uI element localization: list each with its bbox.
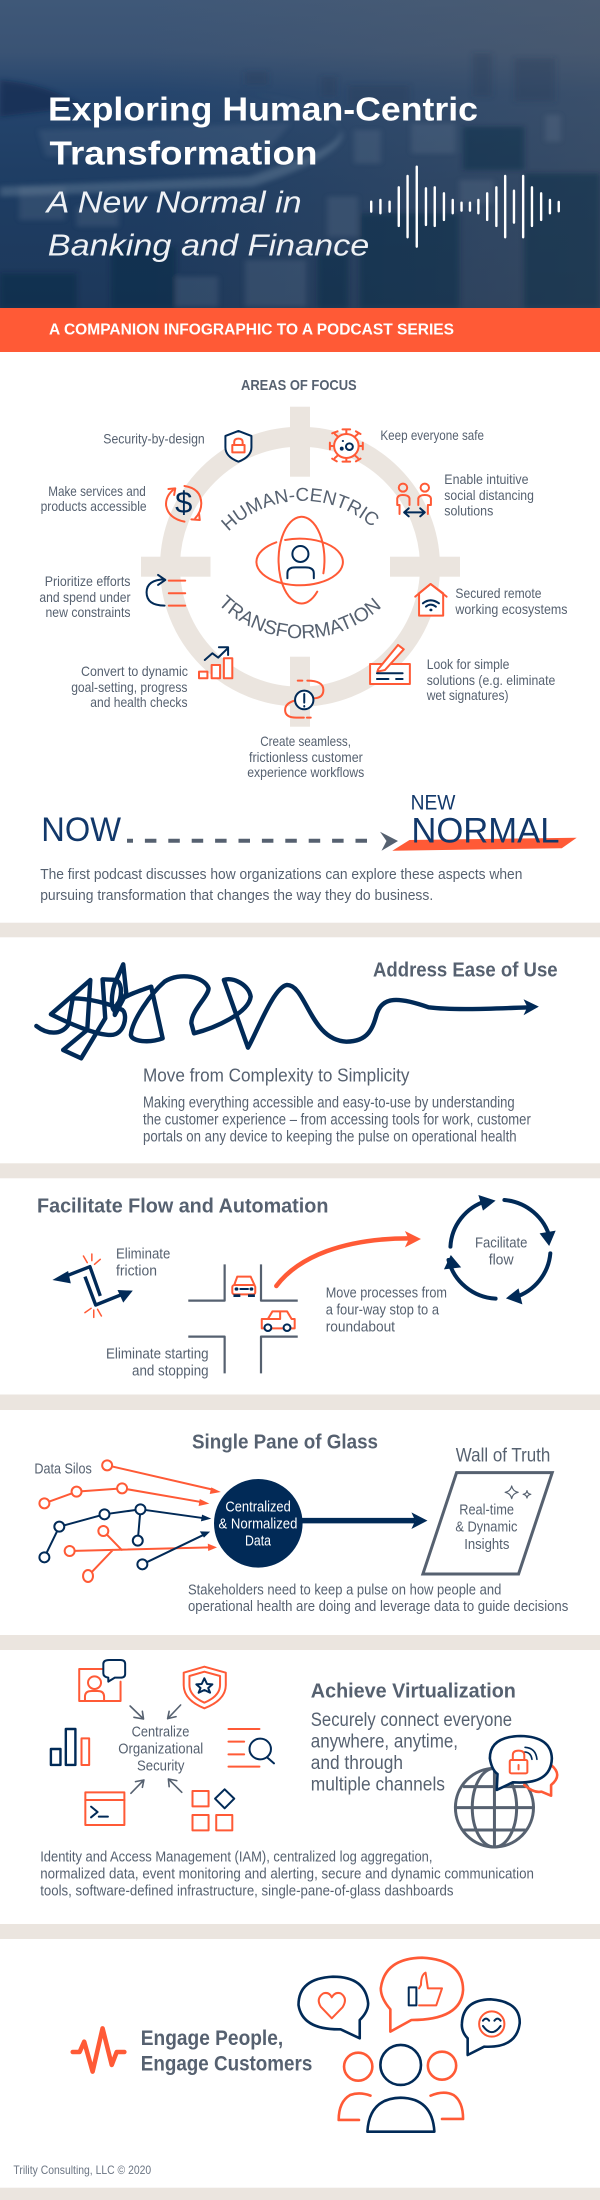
heading	[141, 2026, 312, 2076]
heading: address ease of use: Address Ease of Use	[373, 959, 558, 982]
label: new normal: NORMAL	[411, 812, 560, 851]
label: eliminate friction: friction	[116, 1262, 157, 1279]
panel: facilitate flow and automation	[37, 1195, 556, 1380]
label: move processes: roundabout	[326, 1318, 396, 1335]
label: new normal: NEW	[411, 791, 456, 814]
pane: real-time insights: Insights	[464, 1536, 509, 1553]
pane: real-time insights: & Dynamic	[455, 1519, 518, 1536]
icon: people group	[339, 2045, 463, 2132]
heading: Achieve Virtualization	[311, 1680, 516, 1703]
banner: companion infographic: A COMPANION INFOGRAPHIC TO A PODCAST SERIES	[49, 322, 454, 339]
node: centralized data: Centralized	[225, 1499, 291, 1516]
intro text	[40, 867, 522, 904]
label: make services accessible: products accessible	[41, 498, 147, 514]
label: simple solutions: wet signatures)	[426, 687, 509, 703]
label: frictionless workflows: Create seamless,	[260, 733, 351, 749]
heading: Single Pane of Glass	[192, 1430, 378, 1453]
label: facilitate flow: flow	[489, 1251, 514, 1268]
icon: virus	[330, 429, 363, 462]
label: goal-setting: and health checks	[90, 694, 188, 710]
icon: loop and list	[147, 575, 185, 606]
icon: security shield	[184, 1667, 226, 1708]
label: prioritize efforts: and spend under	[39, 589, 131, 605]
curved label: human-centric: HUMAN-CENTRIC	[220, 488, 378, 531]
tagline	[311, 1710, 512, 1796]
label: make services accessible: Make services and	[48, 483, 146, 499]
panel: address ease of use	[36, 959, 558, 1145]
label: move processes: a four-way stop to a	[326, 1301, 440, 1318]
label: move processes	[326, 1284, 447, 1335]
label: new normal	[411, 791, 560, 851]
icon: globe with chat	[455, 1736, 557, 1847]
body text: Identity and Access Management (IAM), centralized log aggregation,	[40, 1849, 432, 1866]
intersection	[188, 1264, 298, 1373]
label: goal-setting: goal-setting, progress	[71, 679, 188, 695]
subtitle: Banking and Finance	[48, 228, 369, 263]
subtitle: A New Normal in	[44, 185, 302, 220]
label: data silos: Data Silos	[34, 1461, 92, 1477]
intro text: pursuing transformation that changes the way they do business.	[40, 888, 433, 904]
label: make services accessible	[41, 483, 147, 514]
label: simple solutions: Look for simple	[427, 656, 510, 672]
label: secured remote	[455, 585, 568, 617]
icon: flow cycle	[444, 1195, 556, 1304]
icon: house wifi	[415, 584, 447, 616]
label: social distancing: solutions	[444, 502, 493, 518]
heading: Engage Customers	[141, 2052, 312, 2076]
curved label: transformation: TRANSFORMATION	[222, 594, 381, 638]
label: eliminate starting and stopping	[106, 1345, 209, 1380]
body text: the customer experience – from accessing tools for work, customer	[143, 1111, 531, 1128]
banner: companion infographic	[0, 308, 600, 352]
label: simple solutions: solutions (e.g. eliminate	[427, 672, 555, 688]
icon: thumbs-up bubble	[381, 1958, 463, 2032]
icon: signature check	[370, 645, 410, 684]
tagline: Securely connect everyone	[311, 1710, 512, 1731]
icon: dollar cycle: $	[175, 485, 192, 520]
label: social distancing	[444, 471, 534, 518]
panel: single pane of glass	[34, 1430, 568, 1615]
icon: people apart	[397, 484, 431, 516]
body text: tools, software-defined infrastructure, single-pane-of-glass dashboards	[40, 1883, 453, 1900]
label: facilitate flow	[475, 1234, 527, 1268]
icon: video user chat	[79, 1660, 125, 1701]
panel: achieve virtualization	[40, 1660, 557, 1900]
icon: app grid	[192, 1789, 234, 1830]
subheading: Move from Complexity to Simplicity	[143, 1065, 410, 1086]
intro text: The first podcast discusses how organizations can explore these aspects when	[40, 867, 522, 883]
body text: Stakeholders need to keep a pulse on how people and	[188, 1582, 501, 1599]
label: frictionless workflows: experience workflows	[247, 764, 364, 780]
footer credit: Trility Consulting, LLC © 2020	[13, 2163, 151, 2177]
subtitle	[44, 185, 369, 263]
label: now: NOW	[41, 811, 121, 849]
tagline: multiple channels	[311, 1775, 445, 1796]
pane: real-time insights: Real-time	[459, 1502, 514, 1519]
icon: side car	[262, 1311, 295, 1331]
icon: audio waveform	[371, 167, 559, 247]
label: prioritize efforts: Prioritize efforts	[45, 573, 130, 589]
body text	[188, 1582, 568, 1615]
label: eliminate friction: Eliminate	[116, 1245, 170, 1262]
label: eliminate friction	[116, 1245, 170, 1279]
pane: real-time insights	[423, 1473, 552, 1574]
icon: smiley bubble	[462, 1999, 520, 2055]
icon: pulse	[73, 2028, 124, 2072]
tagline: and through	[311, 1753, 403, 1774]
tagline: anywhere, anytime,	[311, 1731, 458, 1752]
body text: Making everything accessible and easy-to-use by understanding	[143, 1094, 515, 1111]
icon: person in orbit	[256, 517, 343, 603]
label: simple solutions	[426, 656, 555, 703]
icon: dollar cycle	[166, 485, 201, 522]
label: security-by-design: Security-by-design	[103, 430, 205, 446]
label: frictionless workflows: frictionless customer	[249, 749, 363, 765]
icon: growth chart	[199, 647, 232, 678]
hero background photo tint	[0, 0, 600, 309]
panel: areas of focus	[39, 377, 568, 780]
label: prioritize efforts: new constraints	[46, 604, 130, 620]
label: secured remote: Secured remote	[455, 585, 542, 601]
label: move processes: Move processes from	[326, 1284, 447, 1301]
swoosh under normal	[392, 838, 577, 851]
heading: areas of focus: AREAS OF FOCUS	[241, 377, 357, 394]
icon: top car	[232, 1277, 255, 1297]
icon: terminal	[85, 1792, 124, 1825]
panel: hero banner	[0, 0, 600, 309]
arrow: to wall of truth	[300, 1512, 427, 1529]
icon: shield lock	[225, 431, 251, 462]
panel: now to new normal	[40, 791, 577, 904]
label: eliminate starting and stopping: and stopping	[132, 1363, 209, 1380]
label: centralize security: Organizational	[118, 1741, 203, 1758]
icon: log search	[228, 1729, 274, 1767]
label: prioritize efforts	[39, 573, 131, 620]
icon: bar chart	[51, 1729, 89, 1765]
label: centralize security	[118, 1724, 203, 1775]
icon: workflow alert	[285, 681, 323, 718]
label: centralize security: Centralize	[132, 1724, 189, 1741]
label: goal-setting	[71, 663, 188, 710]
label: eliminate starting and stopping: Eliminate starting	[106, 1345, 209, 1362]
label: social distancing: Enable intuitive	[444, 471, 529, 487]
body text: portals on any device to keeping the pulse on operational health	[143, 1128, 517, 1145]
icon: friction arrows	[52, 1254, 133, 1317]
node: centralized data	[214, 1479, 303, 1568]
node: centralized data: Data	[245, 1532, 272, 1549]
label: frictionless workflows	[247, 733, 364, 780]
scribble arrow	[36, 964, 539, 1058]
heading: Engage People,	[141, 2026, 283, 2050]
dashed arrow	[127, 832, 398, 851]
label: centralize security: Security	[137, 1758, 185, 1775]
heading: Facilitate Flow and Automation	[37, 1195, 328, 1218]
title: Exploring Human-Centric	[48, 91, 478, 128]
title	[48, 91, 478, 171]
title: Transformation	[50, 134, 318, 171]
node: centralized data: & Normalized	[218, 1515, 297, 1532]
ring with crossbars	[141, 407, 460, 727]
label: keep everyone safe: Keep everyone safe	[380, 427, 484, 443]
body text	[143, 1094, 531, 1145]
label: secured remote: working ecosystems	[455, 601, 568, 617]
arrows to centre	[130, 1705, 182, 1793]
panel: engage people	[13, 1958, 520, 2177]
label: wall of truth: Wall of Truth	[456, 1446, 550, 1467]
data silo network	[39, 1460, 221, 1582]
label: goal-setting: Convert to dynamic	[81, 663, 188, 679]
label: facilitate flow: Facilitate	[475, 1234, 527, 1251]
body text: normalized data, event monitoring and alerting, secure and dynamic communication	[40, 1866, 534, 1883]
icon: heart bubble	[299, 1977, 368, 2038]
label: social distancing: social distancing	[444, 487, 534, 503]
arrow: to roundabout	[276, 1231, 421, 1286]
body text	[40, 1849, 534, 1900]
